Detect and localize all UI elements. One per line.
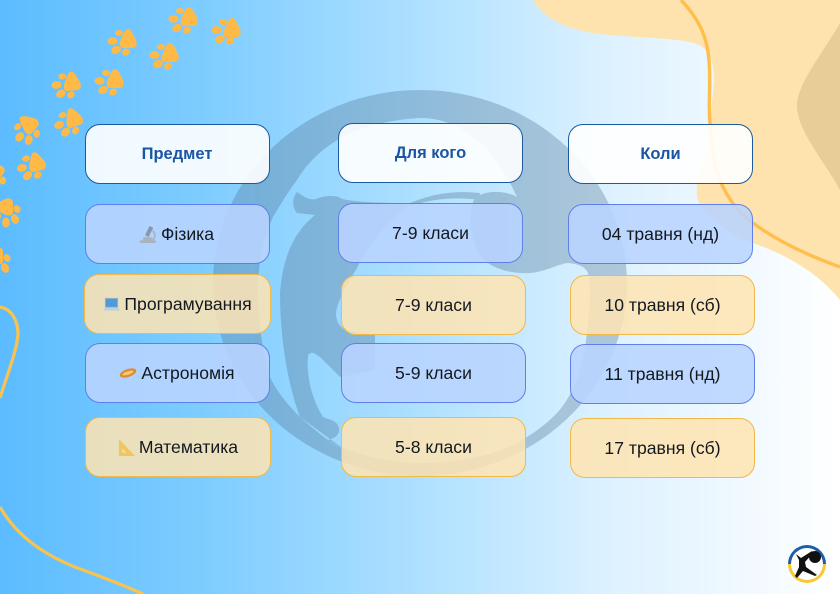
date: astronomy: 11 травня (нд) bbox=[605, 364, 720, 384]
audience: astronomy: 5-9 класи bbox=[395, 362, 472, 382]
watermark: ring and figure bbox=[213, 90, 627, 476]
subject: astronomy: Астрономія bbox=[141, 362, 235, 382]
subject: mathematics: Математика bbox=[139, 436, 238, 456]
audience: mathematics bbox=[341, 417, 526, 477]
audience: mathematics: 5-8 класи bbox=[395, 436, 472, 456]
header: subject: Предмет bbox=[142, 144, 212, 162]
subject: physics: Фізика bbox=[161, 224, 214, 244]
audience: programming: 7-9 класи bbox=[395, 294, 472, 314]
darker blob: right edge bbox=[797, 23, 840, 190]
header: audience: Для кого bbox=[395, 144, 466, 162]
date: programming: 10 травня (сб) bbox=[604, 294, 721, 314]
audience: programming bbox=[341, 275, 526, 335]
orange curve: top right bbox=[681, 0, 840, 267]
date: mathematics: 17 травня (сб) bbox=[604, 438, 721, 458]
subject: astronomy bbox=[84, 343, 270, 403]
date: programming bbox=[570, 275, 755, 335]
date: physics bbox=[568, 204, 753, 264]
header: when: Коли bbox=[640, 144, 681, 162]
audience: physics bbox=[338, 203, 523, 263]
subject: programming bbox=[84, 274, 271, 334]
subject: mathematics bbox=[85, 417, 271, 477]
subject: programming: Програмування bbox=[124, 294, 252, 314]
orange curve: left loop bbox=[0, 307, 18, 398]
date: mathematics bbox=[570, 418, 755, 478]
audience: physics: 7-9 класи bbox=[392, 222, 469, 242]
audience: astronomy bbox=[341, 343, 526, 403]
header: when bbox=[568, 124, 753, 184]
subject: physics bbox=[84, 204, 270, 264]
header: audience bbox=[338, 123, 523, 183]
paw prints bbox=[0, 7, 241, 276]
peach blob: top right bbox=[533, 0, 840, 300]
date: astronomy bbox=[570, 344, 755, 404]
header: subject bbox=[84, 124, 270, 184]
logo bbox=[788, 545, 826, 583]
orange curve: bottom left bbox=[0, 507, 143, 594]
date: physics: 04 травня (нд) bbox=[602, 224, 719, 244]
